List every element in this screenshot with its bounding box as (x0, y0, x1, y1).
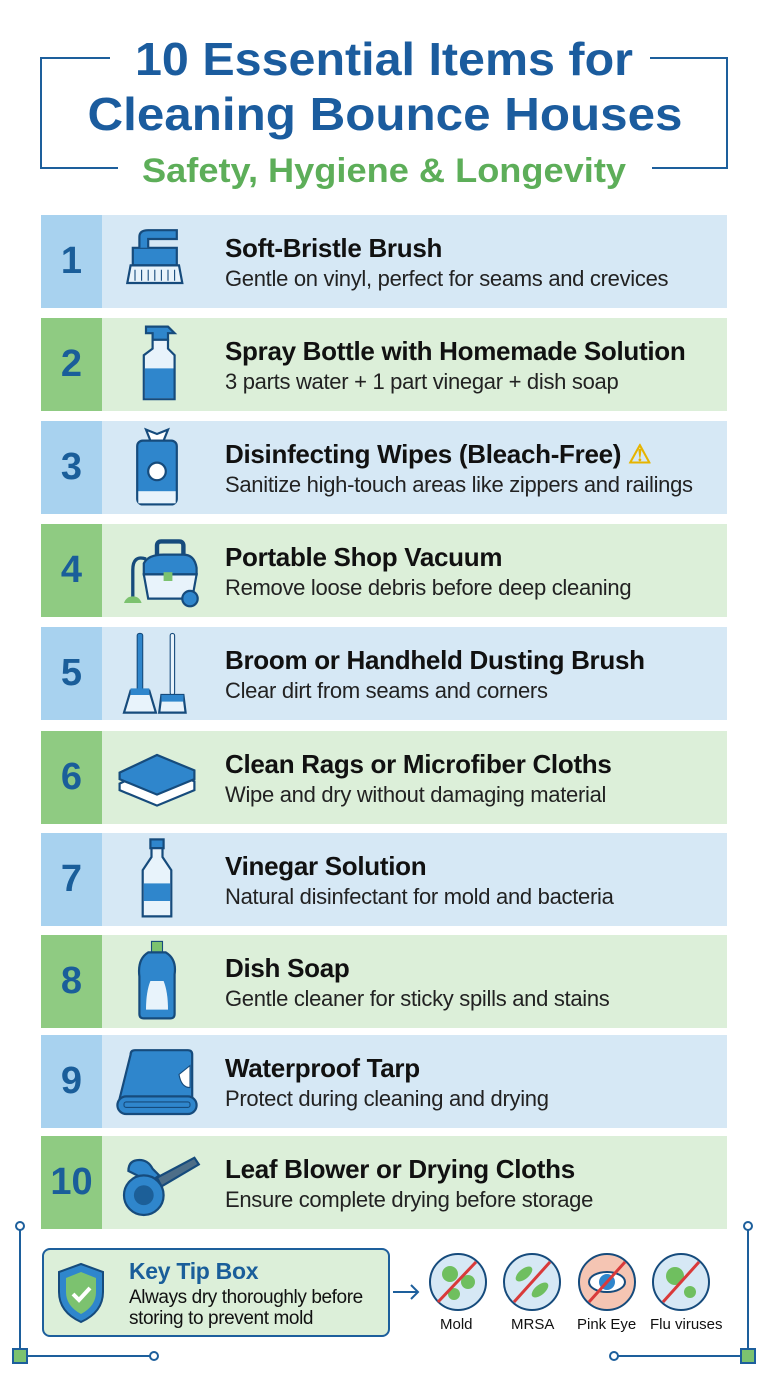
row 5: 5 (61, 652, 82, 694)
row 2: 2 (61, 343, 82, 385)
icon: wipes (136, 428, 178, 506)
key tip box: Always dry thoroughly before (129, 1287, 363, 1308)
icon: cloths (118, 754, 196, 807)
row 10: Ensure complete drying before storage (225, 1187, 593, 1212)
row 10: Leaf Blower or Drying Cloths (225, 1154, 575, 1184)
row 8: 8 (61, 960, 82, 1002)
row 7: 7 (61, 858, 82, 900)
row 8 (41, 935, 727, 1028)
row 1: 1 (61, 240, 82, 282)
title frame (40, 57, 728, 169)
row 7: Natural disinfectant for mold and bacteria (225, 884, 614, 909)
germ icons: Pink Eye (577, 1316, 636, 1333)
icon: vinegar bottle (142, 838, 172, 918)
row 4: Portable Shop Vacuum (225, 542, 502, 572)
row 9: Waterproof Tarp (225, 1053, 420, 1083)
germ icons: Mold (440, 1316, 473, 1333)
germ icons (429, 1253, 723, 1333)
row 4: 4 (61, 549, 82, 591)
row 2: Spray Bottle with Homemade Solution (225, 336, 685, 366)
row 3: Disinfecting Wipes (Bleach-Free) ⚠ (225, 439, 651, 469)
icon: vacuum (124, 539, 199, 608)
corner decorations (12, 1221, 756, 1364)
row 10 (41, 1136, 727, 1229)
row 6: 6 (61, 756, 82, 798)
icon: spray bottle (142, 326, 178, 400)
row 9 (41, 1035, 727, 1128)
title: 10 Essential Items for (135, 33, 633, 85)
row 6: Clean Rags or Microfiber Cloths (225, 749, 612, 779)
row 2: 3 parts water + 1 part vinegar + dish soap (225, 369, 618, 394)
row 9: Protect during cleaning and drying (225, 1086, 549, 1111)
row 5: Clear dirt from seams and corners (225, 678, 548, 703)
icon: leaf blower (122, 1156, 200, 1216)
key tip box: Key Tip Box (129, 1258, 258, 1284)
row 2 (41, 318, 727, 411)
icon: dish soap (138, 940, 176, 1020)
row 4 (41, 524, 727, 617)
row 3 (41, 421, 727, 514)
icon: shield (58, 1262, 104, 1324)
row 7: Vinegar Solution (225, 851, 426, 881)
row 6 (41, 731, 727, 824)
title: Cleaning Bounce Houses (88, 88, 682, 140)
icon: tarp (116, 1049, 198, 1116)
title (88, 33, 682, 190)
icon: brush (126, 229, 184, 284)
row 10: 10 (50, 1161, 93, 1203)
germ icons: Flu viruses (650, 1316, 723, 1333)
row 9: 9 (61, 1060, 82, 1102)
row 8: Dish Soap (225, 953, 349, 983)
row 1: Soft-Bristle Brush (225, 233, 442, 263)
row 7 (41, 833, 727, 926)
row 4: Remove loose debris before deep cleaning (225, 575, 631, 600)
key tip box (42, 1248, 390, 1337)
row 5 (41, 627, 727, 720)
row 3: Sanitize high-touch areas like zippers and railings (225, 472, 693, 497)
row 6: Wipe and dry without damaging material (225, 782, 606, 807)
row 1: Gentle on vinyl, perfect for seams and crevices (225, 266, 668, 291)
row 1 (41, 215, 727, 308)
row 8: Gentle cleaner for sticky spills and stains (225, 986, 610, 1011)
row 5: Broom or Handheld Dusting Brush (225, 645, 645, 675)
key tip box: storing to prevent mold (129, 1308, 313, 1329)
title: Safety, Hygiene & Longevity (142, 152, 626, 190)
row 3: 3 (61, 446, 82, 488)
germ icons: MRSA (511, 1316, 554, 1333)
icon: brooms (122, 632, 187, 714)
